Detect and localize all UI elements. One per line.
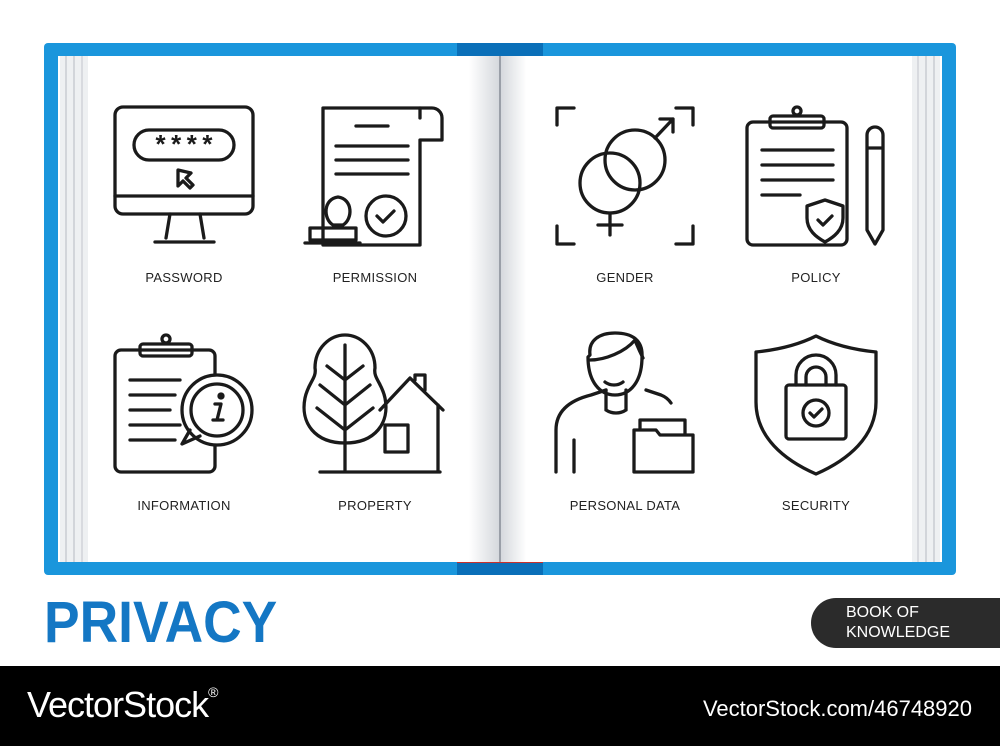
icon: security <box>756 336 876 474</box>
book: PERMISSION <box>333 270 417 285</box>
book: GENDER <box>596 270 654 285</box>
book: INFORMATION <box>137 498 231 513</box>
book: PERSONAL DATA <box>570 498 680 513</box>
footer bar: VectorStock.com/46748920 <box>703 696 972 721</box>
icon: permission <box>305 108 442 245</box>
book: POLICY <box>791 270 841 285</box>
footer bar <box>0 666 1000 746</box>
badge: book of knowledge: BOOK OF <box>846 604 919 621</box>
icon: information <box>115 335 252 472</box>
icon: personal data <box>556 333 693 472</box>
icon: gender <box>557 108 693 244</box>
badge: book of knowledge <box>811 598 1000 648</box>
labels: PASSWORD <box>145 270 223 285</box>
book: PROPERTY <box>338 498 412 513</box>
icon: password: **** <box>153 132 215 162</box>
badge: book of knowledge: KNOWLEDGE <box>846 624 950 641</box>
icon: policy <box>747 107 883 245</box>
icon: password <box>115 107 253 242</box>
book: SECURITY <box>782 498 850 513</box>
icon: property <box>304 335 443 472</box>
footer bar: VectorStock® <box>27 684 217 725</box>
title: PRIVACY <box>44 590 277 655</box>
